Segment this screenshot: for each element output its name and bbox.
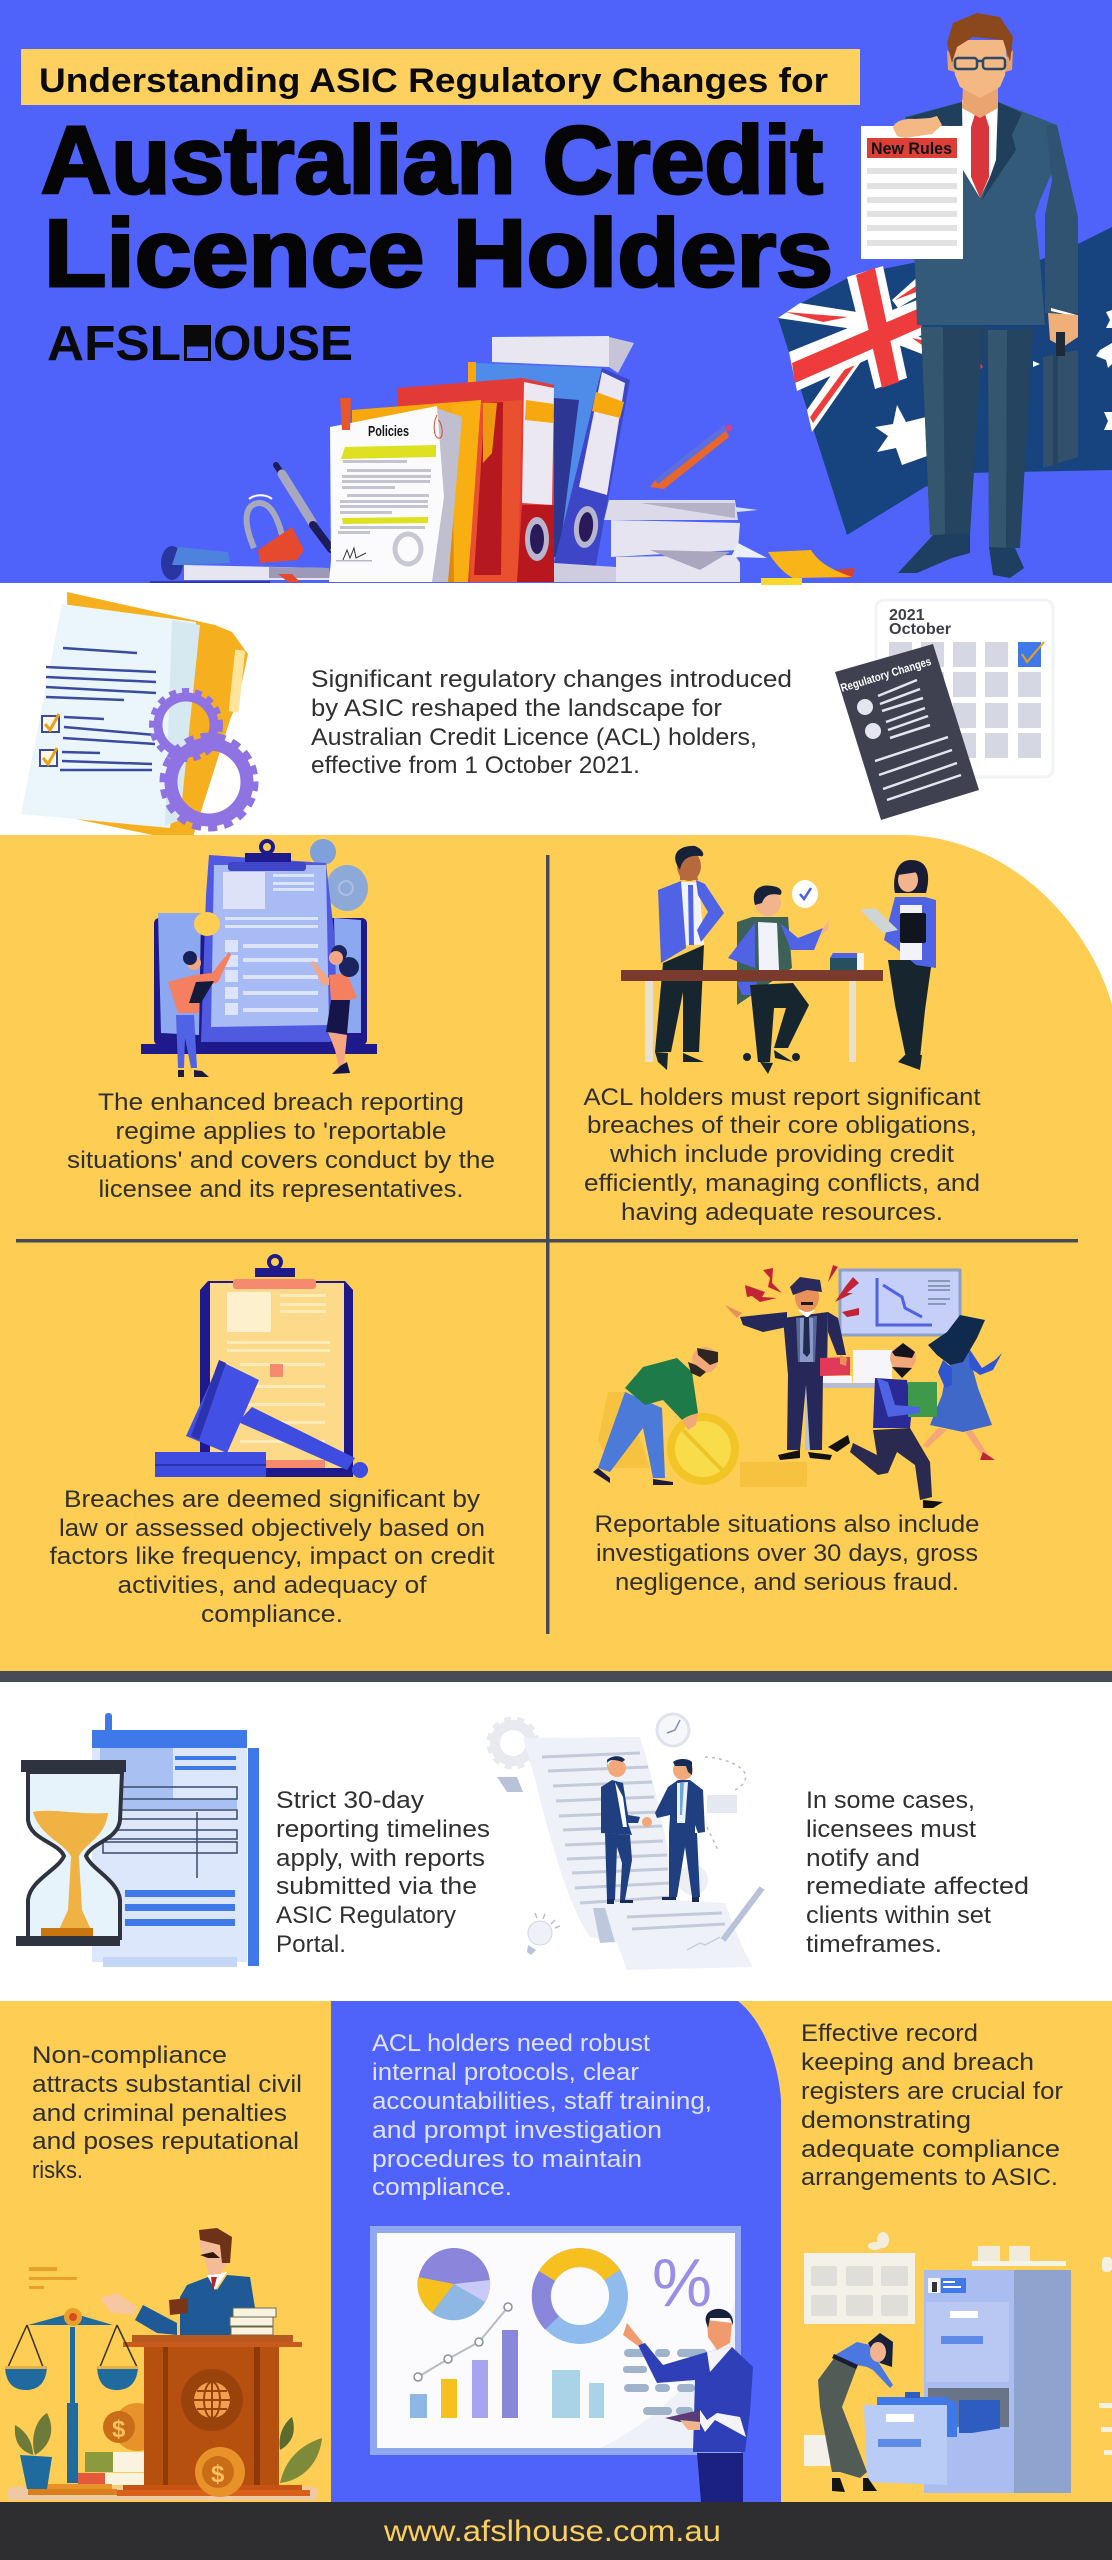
text: record keeping: registers are crucial for	[801, 2078, 1063, 2105]
text: breaches deemed significant	[50, 1486, 495, 1628]
text: non-compliance: attracts substantial civil	[32, 2071, 302, 2098]
illustration: padlock	[247, 495, 304, 582]
text: introduction	[311, 666, 792, 779]
illustration: man in suit holding New Rules sheet	[861, 13, 1078, 578]
podium	[117, 2335, 310, 2497]
icon: gavel	[155, 1360, 368, 1478]
text: robust internal protocols: accountabilities, staff training,	[372, 2088, 712, 2115]
person: bent man pushing coin	[593, 1347, 739, 1485]
illustration: policies document	[329, 398, 462, 582]
text: notify and remediate: licensees must	[806, 1816, 976, 1843]
illustration: policies document: Policies	[368, 424, 409, 440]
panel: non-compliance	[0, 2001, 332, 2502]
text: record keeping: Effective record	[801, 2020, 978, 2047]
text: robust internal protocols: ACL holders need robust	[372, 2030, 650, 2057]
bar chart	[410, 2303, 604, 2418]
logo: AFSL House	[47, 317, 353, 371]
text: non-compliance: and criminal penalties	[32, 2100, 287, 2127]
person: left businessman	[601, 1756, 640, 1904]
New Rules sheet	[861, 126, 963, 259]
title	[41, 107, 833, 307]
text: robust internal protocols: and prompt investigation	[372, 2117, 662, 2144]
text: introduction: by ASIC reshaped the landscape for	[311, 695, 722, 722]
text: robust internal protocols: compliance.	[372, 2174, 512, 2201]
person: judge	[100, 2228, 276, 2335]
icon: scales	[5, 2308, 138, 2495]
illustration: sticky note	[761, 550, 855, 585]
illustration: clipboard and gavel	[155, 1256, 368, 1478]
panel: header	[0, 0, 1112, 585]
text: record keeping	[801, 2020, 1063, 2191]
text: report significant breaches	[584, 1084, 981, 1226]
panel: yellow breach grid	[0, 835, 1112, 1682]
text: notify and remediate: notify and	[806, 1845, 920, 1872]
icon: gears	[152, 691, 255, 828]
text: breaches deemed significant: Breaches are deemed significant by	[64, 1486, 481, 1513]
text: report significant breaches: ACL holders must report significant	[584, 1084, 981, 1111]
footer: www.afslhouse.com.au	[383, 2515, 721, 2548]
illustration: judge, scales and coins	[5, 2228, 322, 2500]
text: breaches deemed significant: law or assessed objectively based on	[59, 1515, 485, 1542]
text: reportable situations: negligence, and serious fraud.	[615, 1569, 959, 1596]
text: enhanced breach reporting regime: regime applies to 'reportable	[116, 1118, 446, 1145]
person: woman leaving	[923, 1315, 1002, 1460]
person: presenter	[623, 2309, 753, 2502]
text: introduction: effective from 1 October 2021.	[311, 752, 640, 779]
person: right businessman	[642, 1759, 705, 1902]
title: Licence Holders	[44, 200, 833, 307]
cabinet	[864, 2246, 1071, 2493]
New Rules sheet: New Rules	[871, 139, 952, 158]
text: reportable situations: Reportable situations also include	[594, 1511, 980, 1538]
text: enhanced breach reporting regime: situations' and covers conduct by the	[67, 1147, 495, 1174]
subtitle banner	[21, 49, 860, 105]
illustration: Australian flag	[778, 227, 1112, 535]
illustration: filing cabinet and woman	[804, 2232, 1112, 2493]
open drawer	[864, 2392, 1009, 2485]
text: strict 30-day reporting: reporting timelines	[276, 1816, 490, 1843]
icon: anger bolts	[745, 1265, 859, 1317]
person: woman filing	[818, 2333, 893, 2492]
logo: AFSL House: OUSE	[213, 317, 353, 371]
text: strict 30-day reporting: Portal.	[276, 1931, 346, 1958]
panel: internal protocols	[331, 2001, 781, 2502]
text: non-compliance	[32, 2042, 302, 2184]
icon: regulatory changes document: Regulatory Changes	[839, 656, 933, 695]
illustration: paper stack	[554, 500, 767, 582]
text: reportable situations	[594, 1511, 980, 1596]
text: record keeping: keeping and breach	[801, 2049, 1034, 2076]
illustration: orange folder	[352, 400, 497, 582]
icon: check bubble	[792, 880, 818, 908]
text: report significant breaches: breaches of their core obligations,	[587, 1112, 977, 1139]
illustration: calendar with regulatory changes document: 2021	[889, 607, 925, 624]
text: notify and remediate	[806, 1787, 1029, 1958]
donut chart	[541, 2258, 618, 2334]
text: introduction: Significant regulatory changes introduced	[311, 666, 792, 693]
text: breaches deemed significant: factors like frequency, impact on credit	[50, 1543, 495, 1570]
text: report significant breaches: efficiently, managing conflicts, and	[584, 1170, 980, 1197]
text: non-compliance: risks.	[32, 2157, 83, 2184]
person: standing man	[655, 846, 724, 1070]
person: angry boss	[725, 1265, 859, 1460]
illustration: folder with checklist and gears	[21, 592, 255, 843]
person: seated man	[728, 886, 829, 1074]
chart board	[805, 1270, 960, 1450]
text: record keeping: arrangements to ASIC.	[801, 2164, 1058, 2191]
illustration: handshake on contract	[489, 1714, 762, 1970]
text: report significant breaches: having adequate resources.	[621, 1199, 943, 1226]
text: reportable situations: investigations over 30 days, gross	[596, 1540, 978, 1567]
subtitle banner: Understanding ASIC Regulatory Changes for	[39, 62, 828, 100]
text: strict 30-day reporting: ASIC Regulatory	[276, 1902, 457, 1929]
text: notify and remediate: timeframes.	[806, 1931, 942, 1958]
text: non-compliance: and poses reputational	[32, 2128, 299, 2155]
text: robust internal protocols	[372, 2030, 712, 2201]
board with folders	[804, 2232, 915, 2324]
illustration: clipboard and two people	[141, 839, 377, 1077]
text: report significant breaches: which include providing credit	[609, 1141, 954, 1168]
person: man with tablet	[168, 951, 231, 1077]
text: introduction: Australian Credit Licence (ACL) holders,	[311, 724, 757, 751]
trousers	[898, 327, 1033, 578]
person: woman	[311, 945, 359, 1074]
title: Australian Credit	[41, 107, 823, 214]
coin stacks	[598, 1392, 807, 1487]
text: enhanced breach reporting regime	[67, 1089, 495, 1203]
percent sign: %	[652, 2245, 712, 2321]
footer	[0, 2502, 1112, 2560]
illustration: calendar with regulatory changes document: October	[889, 621, 951, 638]
illustration: red binder	[398, 378, 554, 582]
text: breaches deemed significant: activities, and adequacy of	[118, 1572, 427, 1599]
illustration: angry boss, coin and staff	[593, 1265, 1002, 1508]
text: robust internal protocols: procedures to maintain	[372, 2146, 642, 2173]
coin and books	[78, 2403, 144, 2485]
illustration: hourglass with document	[16, 1713, 259, 1967]
icon: hourglass	[16, 1760, 126, 1946]
text: notify and remediate: remediate affected	[806, 1873, 1029, 1900]
text: strict 30-day reporting	[276, 1787, 490, 1958]
text: strict 30-day reporting: submitted via the	[276, 1873, 477, 1900]
illustration: open book left	[150, 546, 334, 583]
illustration: pencil	[650, 425, 732, 489]
illustration: briefcase	[1043, 313, 1078, 468]
text: robust internal protocols: internal protocols, clear	[372, 2059, 639, 2086]
text: notify and remediate: In some cases,	[806, 1787, 975, 1814]
desk	[621, 953, 883, 1062]
illustration: three colleagues at desk	[621, 846, 936, 1074]
person: woman with tablet	[860, 860, 936, 1070]
text: enhanced breach reporting regime: licensee and its representatives.	[98, 1176, 464, 1203]
icon: regulatory changes document	[835, 644, 979, 820]
text: notify and remediate: clients within set	[806, 1902, 991, 1929]
podium: $	[211, 2461, 225, 2488]
illustration: calendar with regulatory changes document	[835, 600, 1053, 820]
pie chart	[417, 2248, 490, 2320]
illustration: presentation board	[370, 2226, 741, 2455]
text: record keeping: demonstrating	[801, 2107, 971, 2134]
icon: large coin	[667, 1413, 739, 1485]
text: strict 30-day reporting: Strict 30-day	[276, 1787, 425, 1814]
illustration: blue binder with paper behind	[468, 336, 634, 570]
coin and books: $	[112, 2416, 126, 2443]
illustration: pen	[276, 465, 336, 558]
icon: light bulb	[527, 1913, 560, 1955]
panel: right yellow	[738, 2001, 1112, 2502]
text: record keeping: adequate compliance	[801, 2136, 1060, 2163]
icon: pen and signature	[687, 1888, 762, 1950]
text: non-compliance: Non-compliance	[32, 2042, 227, 2069]
logo: AFSL House: AFSL	[47, 317, 181, 371]
text: enhanced breach reporting regime: The enhanced breach reporting	[98, 1089, 464, 1116]
person: running man with green book	[828, 1343, 943, 1508]
text: strict 30-day reporting: apply, with reports	[276, 1845, 485, 1872]
text: breaches deemed significant: compliance.	[201, 1601, 343, 1628]
icon: plants	[15, 2413, 322, 2489]
